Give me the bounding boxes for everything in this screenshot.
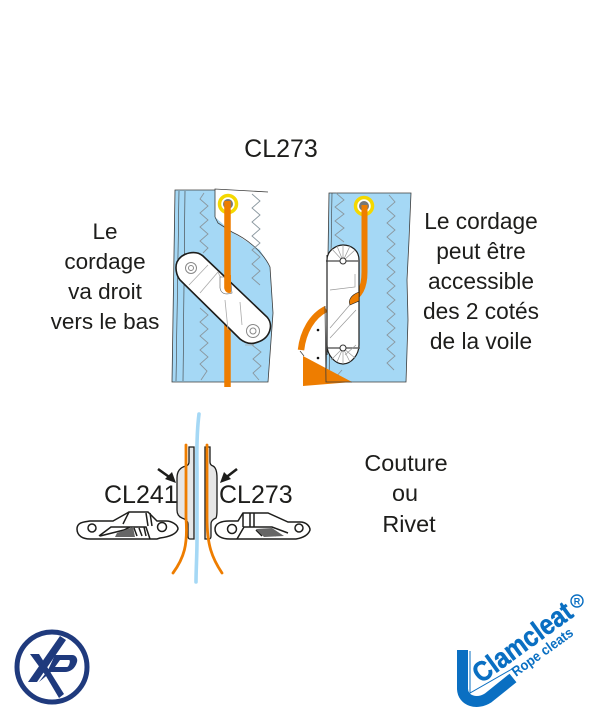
text block: right caption: des 2 cotés [423, 298, 539, 324]
text block: seam or rivet: Couture [364, 450, 448, 476]
diagram: right sail with cleat [300, 193, 411, 386]
text block: left caption: vers le bas [51, 309, 159, 334]
text block: right caption: de la voile [430, 328, 532, 354]
text block: seam or rivet [364, 450, 448, 537]
text block: seam or rivet: ou [392, 480, 418, 506]
text block: right caption: Le cordage [424, 208, 538, 234]
text block: left caption: va droit [68, 279, 143, 304]
orange lines [173, 445, 222, 573]
cleat [176, 253, 270, 345]
text block: right caption: accessible [428, 268, 534, 294]
diagram: left sail with cleat [172, 189, 273, 387]
cleat [326, 245, 360, 364]
text block: left caption: cordage [64, 249, 146, 274]
cleat left [77, 512, 178, 539]
cleat right [215, 513, 310, 539]
labels: CL241 [104, 481, 178, 509]
logo: Clamcleat: Rope cleats [508, 624, 576, 679]
logo: Clamcleat: Clamcleat [466, 596, 578, 689]
arrows [158, 469, 172, 479]
title: CL273 [244, 135, 318, 163]
logo: Clamcleat: R [574, 596, 581, 606]
diagram: cleat section: CL273 [219, 481, 293, 509]
text block: left caption: Le [92, 219, 118, 244]
text block: right caption [423, 208, 539, 354]
diagram: cleat section [77, 414, 310, 582]
sail section body [177, 447, 194, 539]
text block: seam or rivet: Rivet [382, 511, 436, 537]
text block: left caption [51, 219, 159, 334]
text block: right caption: peut être [436, 238, 526, 264]
sail line [196, 414, 199, 582]
logo: XP [17, 632, 87, 702]
